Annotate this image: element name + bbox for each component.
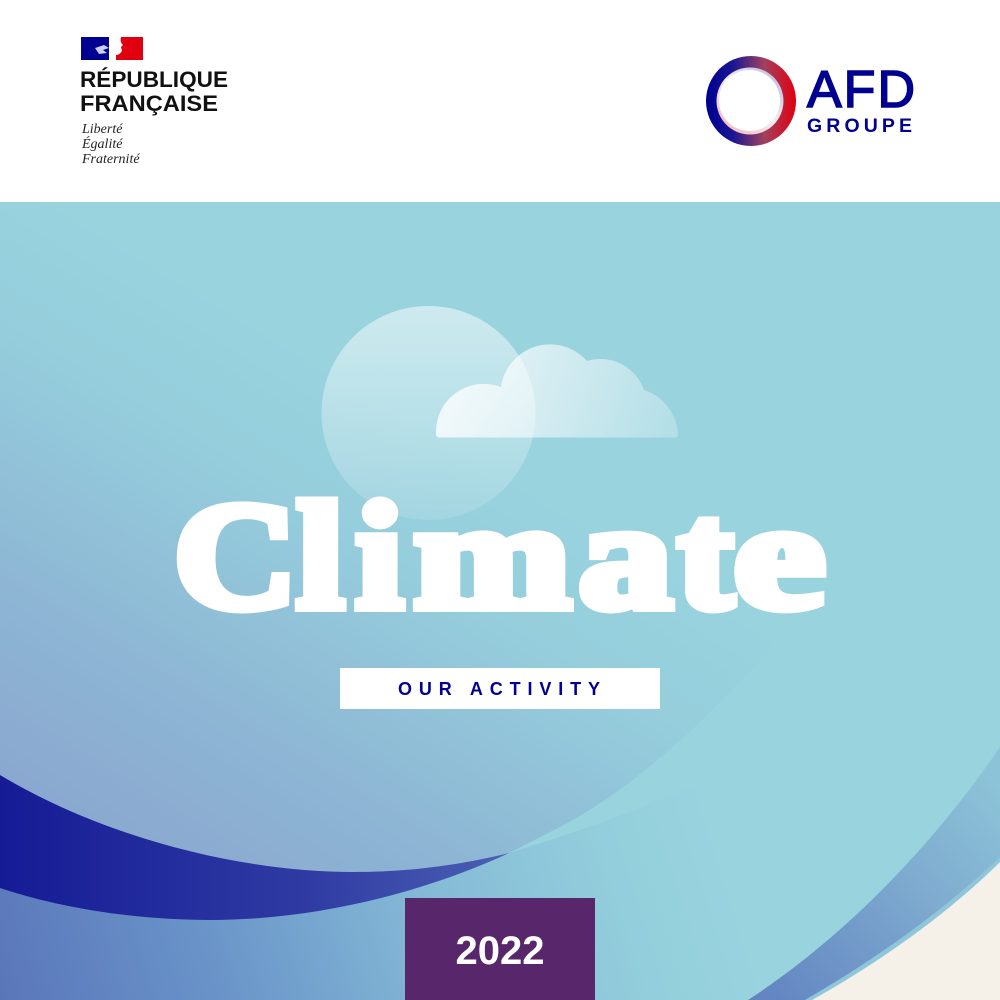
wave: thin band edge bbox=[805, 857, 1000, 1000]
wave: right blue band bbox=[748, 747, 1000, 1000]
wave: upper sky gradient bbox=[0, 202, 1000, 885]
title: i bbox=[356, 472, 403, 640]
header background bbox=[0, 0, 1000, 202]
motto: Liberté bbox=[81, 122, 123, 137]
title: e bbox=[734, 472, 825, 640]
logo: AFD Groupe bbox=[706, 56, 915, 146]
icon: sun bbox=[322, 306, 536, 520]
motto bbox=[81, 122, 140, 167]
title: m bbox=[414, 472, 571, 640]
title: a bbox=[579, 472, 672, 640]
wordmark: République: RÉPUBLIQUE bbox=[80, 67, 228, 92]
title: t bbox=[678, 472, 733, 640]
icon: AFD ring bbox=[706, 56, 796, 146]
wave: beige corner bbox=[812, 862, 1000, 1000]
year box bbox=[405, 898, 595, 1000]
subtitle text: OUR ACTIVITY bbox=[398, 679, 600, 699]
wordmark: AFD: AFD bbox=[807, 61, 915, 119]
logo: République Française bbox=[80, 37, 228, 167]
title: C bbox=[174, 472, 297, 640]
motto: Égalité bbox=[81, 135, 123, 152]
title: l bbox=[297, 472, 344, 640]
subtitle banner bbox=[340, 668, 660, 709]
wordmark: Française: FRANÇAISE bbox=[80, 91, 218, 116]
wordmark: Groupe: GROUPE bbox=[807, 115, 912, 137]
year text: 2022 bbox=[456, 929, 544, 973]
background panel bbox=[0, 202, 1000, 1000]
wave: dark blue crescent bbox=[0, 775, 509, 920]
icon: French flag with Marianne bbox=[81, 37, 143, 60]
icon: cloud bbox=[436, 344, 678, 438]
wave: lower left gradient bbox=[0, 730, 900, 1000]
motto: Fraternité bbox=[81, 152, 140, 167]
